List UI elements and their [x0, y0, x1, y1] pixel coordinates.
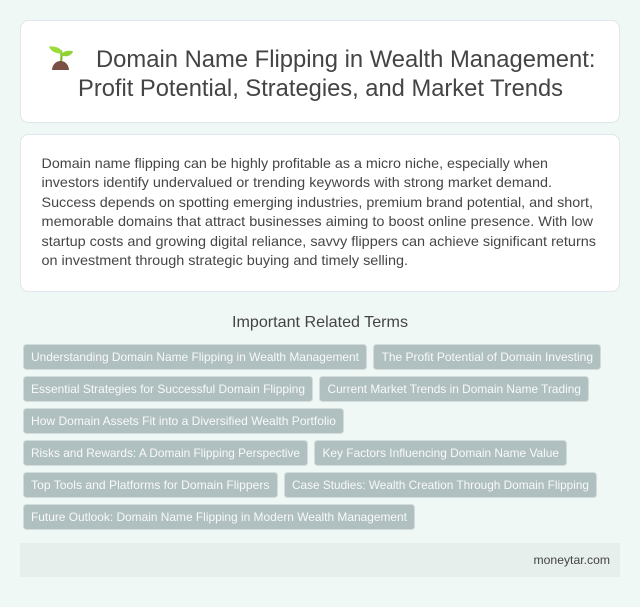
paragraph text	[42, 155, 596, 268]
tag: Top Tools and Platforms for Domain Flippers	[31, 478, 270, 492]
tag: Key Factors Influencing Domain Name Value	[322, 446, 559, 460]
footer source text: moneytar.com	[534, 553, 610, 567]
paragraph text: memorable domains that attract businesses aiming to boost online presence. With low	[42, 213, 594, 229]
tag	[320, 376, 588, 402]
title: Profit Potential, Strategies, and Market Trends	[78, 75, 563, 102]
tag: Essential Strategies for Successful Domain Flipping	[31, 382, 305, 396]
tag: Case Studies: Wealth Creation Through Domain Flipping	[292, 478, 589, 492]
tag: Current Market Trends in Domain Name Trading	[328, 382, 581, 396]
panel: related term tags	[24, 344, 600, 530]
tag: The Profit Potential of Domain Investing	[382, 350, 593, 364]
tag: Understanding Domain Name Flipping in Wealth Management	[31, 350, 360, 364]
tag	[374, 344, 600, 370]
tag	[24, 408, 344, 434]
title	[78, 46, 596, 102]
tag	[24, 472, 278, 498]
tag	[314, 440, 566, 466]
paragraph text: on investment through strategic buying and timely selling.	[42, 252, 408, 268]
tag: How Domain Assets Fit into a Diversified Wealth Portfolio	[31, 414, 336, 428]
paragraph text: startup costs and growing digital reliance, savvy flippers can achieve significant returns	[42, 233, 596, 249]
paragraph text: Success depends on spotting emerging industries, premium brand potential, and short,	[42, 194, 593, 210]
paragraph text: investors identify undervalued or trending keywords with strong market demand.	[42, 174, 552, 190]
footer	[20, 543, 620, 577]
tag	[284, 472, 596, 498]
tag: Future Outlook: Domain Name Flipping in Modern Wealth Management	[31, 510, 408, 524]
title: Domain Name Flipping in Wealth Management:	[96, 46, 596, 73]
tag: Risks and Rewards: A Domain Flipping Perspective	[31, 446, 300, 460]
tag	[24, 440, 308, 466]
panel: title card	[20, 20, 620, 122]
paragraph text: Domain name flipping can be highly profitable as a micro niche, especially when	[42, 155, 548, 171]
heading: important related terms: Important Related Terms	[232, 314, 408, 331]
icon: sprout	[49, 46, 73, 70]
tag	[24, 376, 312, 402]
tag	[24, 344, 366, 370]
panel: summary paragraph	[20, 134, 620, 292]
tag	[24, 504, 414, 530]
